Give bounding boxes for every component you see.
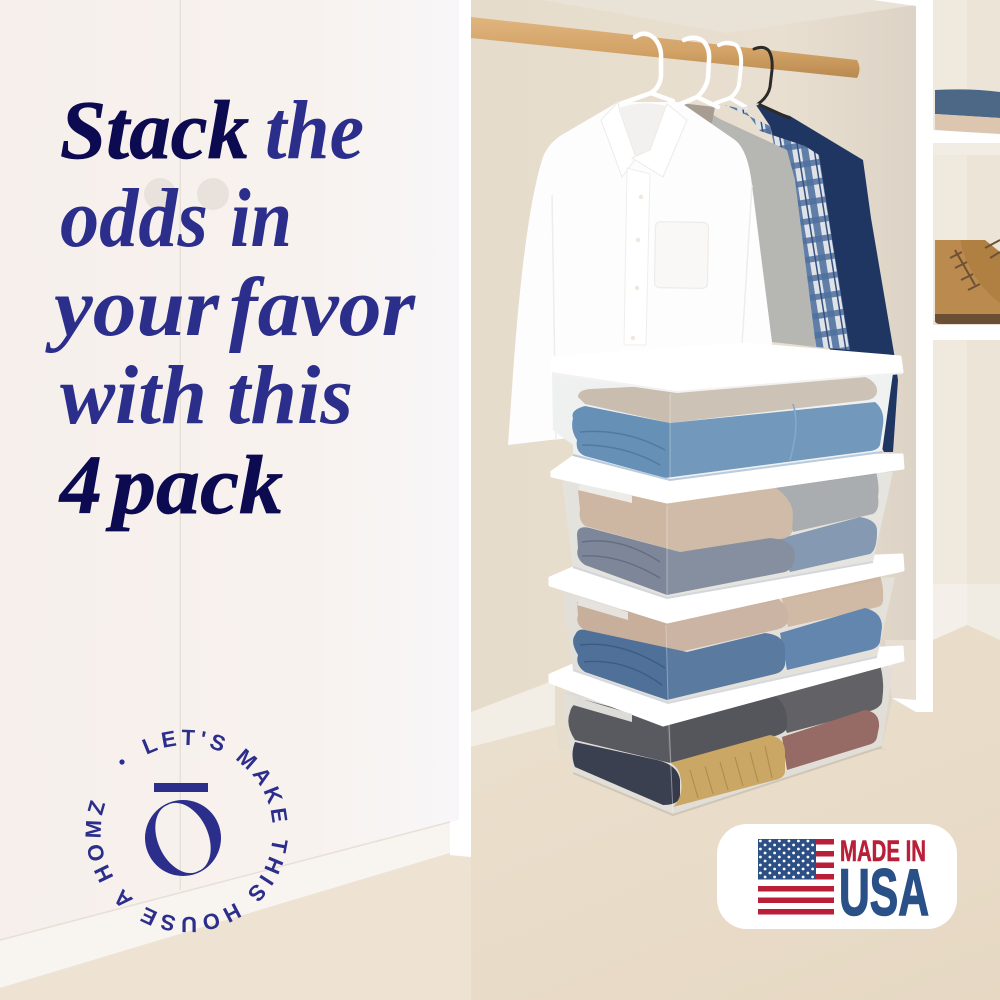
navy jacket on hanger [756,105,898,452]
icon: hangers [620,34,789,118]
folded clothes on shelf [935,89,1000,134]
wooden closet rod [471,17,860,78]
title: pack [106,439,283,532]
badge text [839,835,929,929]
panel: white door frame post [450,0,471,857]
floor [0,600,1000,1000]
title: Stack [60,84,249,177]
badge text: USA [839,855,929,929]
storage box 1 with tan and blue folded clothes [552,344,902,480]
storage box 2 with tan and grey-blue folded clothes [552,455,903,598]
plaid shirt on hanger [725,105,850,350]
icon: boots on shelf [935,240,1000,324]
title: your [45,261,220,354]
title: odds [60,172,208,265]
storage box 4 with dark, mustard and burgundy folded clothes [550,647,903,815]
title: this [227,349,353,442]
panel: wardrobe doors [0,0,471,1000]
title: with [60,349,207,442]
icon: American flag [758,839,834,914]
title [45,84,416,532]
storage box 3 with tan and blue folded clothes [550,555,903,703]
title: favor [229,261,416,354]
circular slogan text: LET'S MAKE THIS HOUSE A HOMZ [85,730,288,932]
logo: Homz round seal [85,730,288,932]
title: in [230,172,292,265]
panel: closet back wall [471,0,917,760]
grey sweater on hanger [680,103,816,347]
logo bar and ring mark [145,783,221,876]
white dress shirt on hanger [508,102,772,445]
title: 4 [58,439,102,532]
badge text: MADE IN [840,835,926,868]
panel: right shelving wall [933,0,1000,700]
title: the [265,84,364,177]
badge: Made in USA [717,824,957,929]
panel: white closet upright [892,0,933,712]
